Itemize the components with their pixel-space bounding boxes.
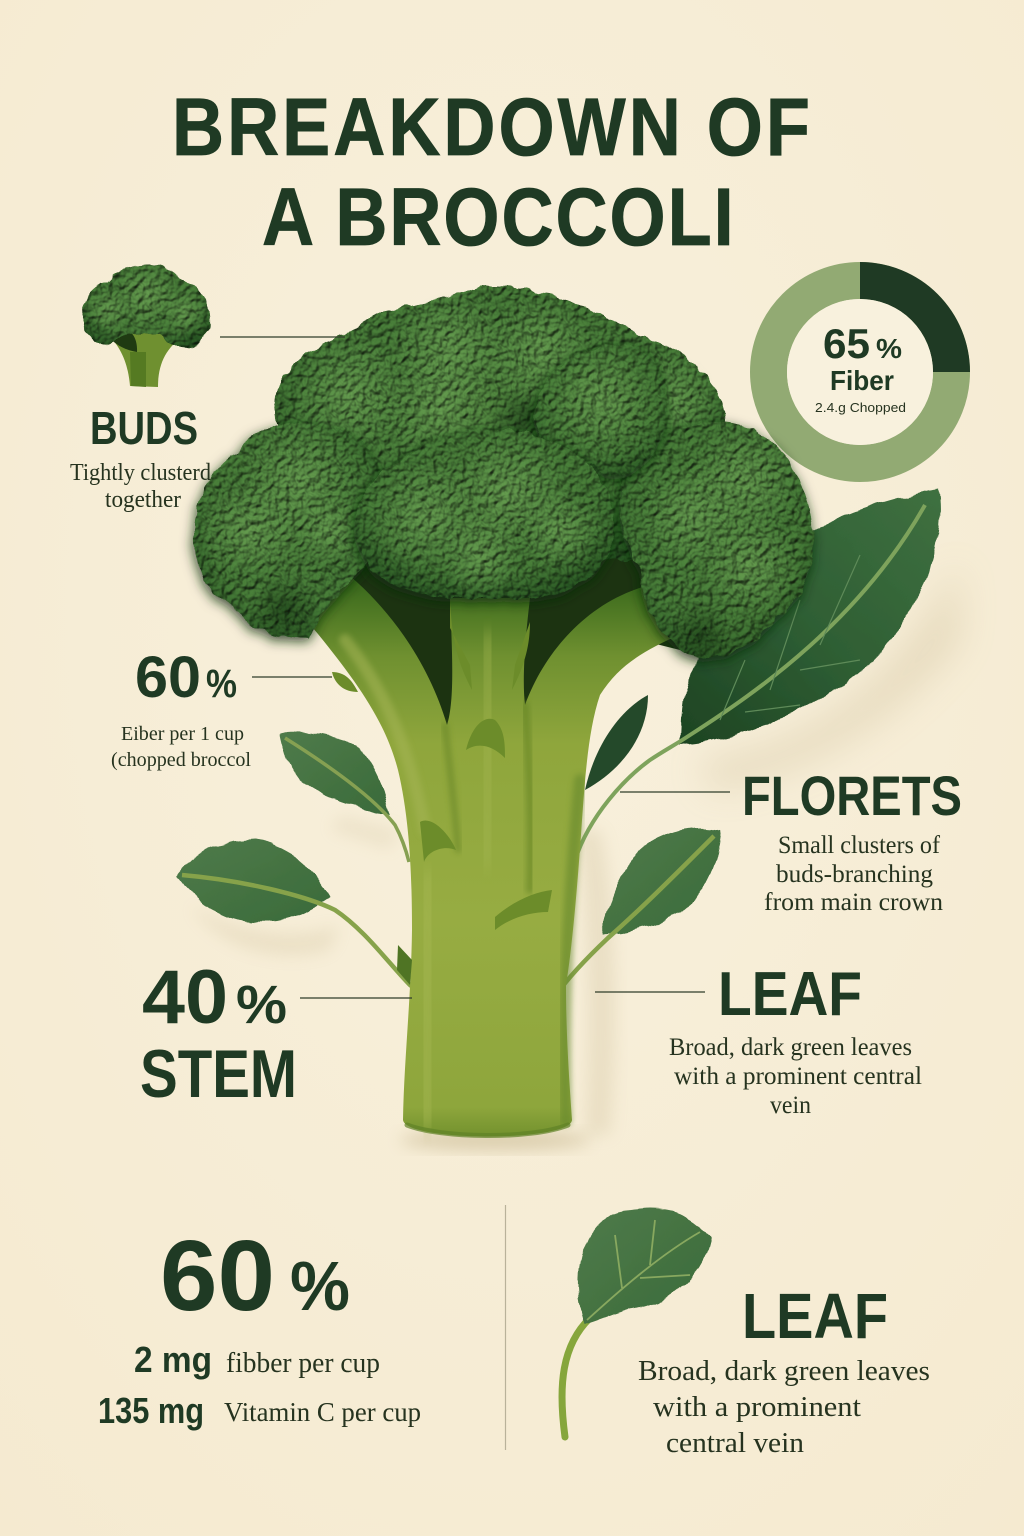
trunk highlights and creases — [345, 640, 580, 1136]
left lower leaf — [176, 840, 434, 1005]
stat: 60% fiber per cup: Eiber per 1 cup — [121, 723, 244, 745]
label: florets — [742, 764, 962, 916]
icon: small broccoli buds — [82, 263, 210, 387]
soft shadows — [190, 560, 960, 1150]
bottom leaf label — [638, 1280, 930, 1459]
label: florets: buds-branching — [776, 861, 933, 888]
stat: 40% stem: % — [236, 975, 287, 1035]
label: leaf: Broad, dark green leaves — [669, 1034, 912, 1061]
label: buds: together — [105, 487, 181, 513]
label: leaf: vein — [770, 1092, 811, 1119]
bottom leaf label: LEAF — [742, 1280, 888, 1352]
icon: bottom leaf — [562, 1209, 710, 1437]
label: buds: Tightly clusterd — [70, 460, 211, 486]
crown back mass — [274, 286, 725, 560]
label: leaf: with a prominent central — [674, 1063, 922, 1090]
label: buds — [70, 402, 211, 513]
donut chart: 65% fiber: Fiber — [830, 365, 894, 396]
stat: 60% fiber per cup — [111, 645, 251, 771]
label: florets: FLORETS — [742, 764, 962, 827]
bottom leaf label: central vein — [666, 1427, 804, 1459]
leader lines — [220, 337, 730, 998]
bottom leaf label: with a prominent — [653, 1391, 861, 1423]
big right leaf — [575, 489, 939, 860]
stat: 60% fiber per cup: % — [206, 662, 237, 706]
title: A BROCCOLI — [262, 172, 734, 263]
donut chart: 65% fiber: 2.4.g Chopped — [815, 400, 906, 415]
bottom stats: 60%: 2 mg — [134, 1339, 212, 1380]
bottom stats: 60%: 60 — [160, 1220, 275, 1332]
stat: 60% fiber per cup: (chopped broccol — [111, 749, 251, 771]
stem and branches — [280, 560, 705, 1136]
label: florets: Small clusters of — [778, 832, 941, 859]
label: leaf — [669, 960, 922, 1119]
stat: 40% stem — [140, 955, 297, 1112]
donut chart: 65% fiber: 65 — [823, 320, 870, 367]
stem nubs — [332, 598, 552, 930]
title: BREAKDOWN OF — [172, 82, 810, 173]
left upper leaf — [279, 732, 409, 862]
small mid leaf — [585, 695, 648, 790]
bottom leaf label: Broad, dark green leaves — [638, 1355, 930, 1387]
bottom stats: 60%: Vitamin C per cup — [224, 1397, 421, 1427]
broccoli crown — [194, 286, 813, 667]
donut chart: 65% fiber: % — [876, 333, 902, 364]
stat: 40% stem: 40 — [142, 955, 228, 1040]
dark hollow under crown — [300, 500, 720, 735]
stat: 60% fiber per cup: 60 — [135, 645, 201, 710]
bottom stats: 60%: fibber per cup — [226, 1347, 380, 1379]
label: leaf: LEAF — [718, 960, 862, 1029]
bottom stats: 60% — [98, 1220, 421, 1431]
donut chart: 65% fiber — [768, 262, 970, 464]
label: buds: BUDS — [90, 402, 198, 454]
top-right floret — [535, 345, 667, 475]
stat: 40% stem: STEM — [140, 1036, 297, 1112]
bottom stats: 60%: 135 mg — [98, 1390, 204, 1431]
center floret — [355, 429, 614, 598]
left floret — [194, 420, 382, 645]
right floret — [620, 422, 813, 667]
title — [172, 82, 810, 263]
right lower leaf — [556, 828, 721, 995]
bottom stats: 60%: % — [290, 1247, 350, 1325]
label: florets: from main crown — [764, 889, 944, 916]
